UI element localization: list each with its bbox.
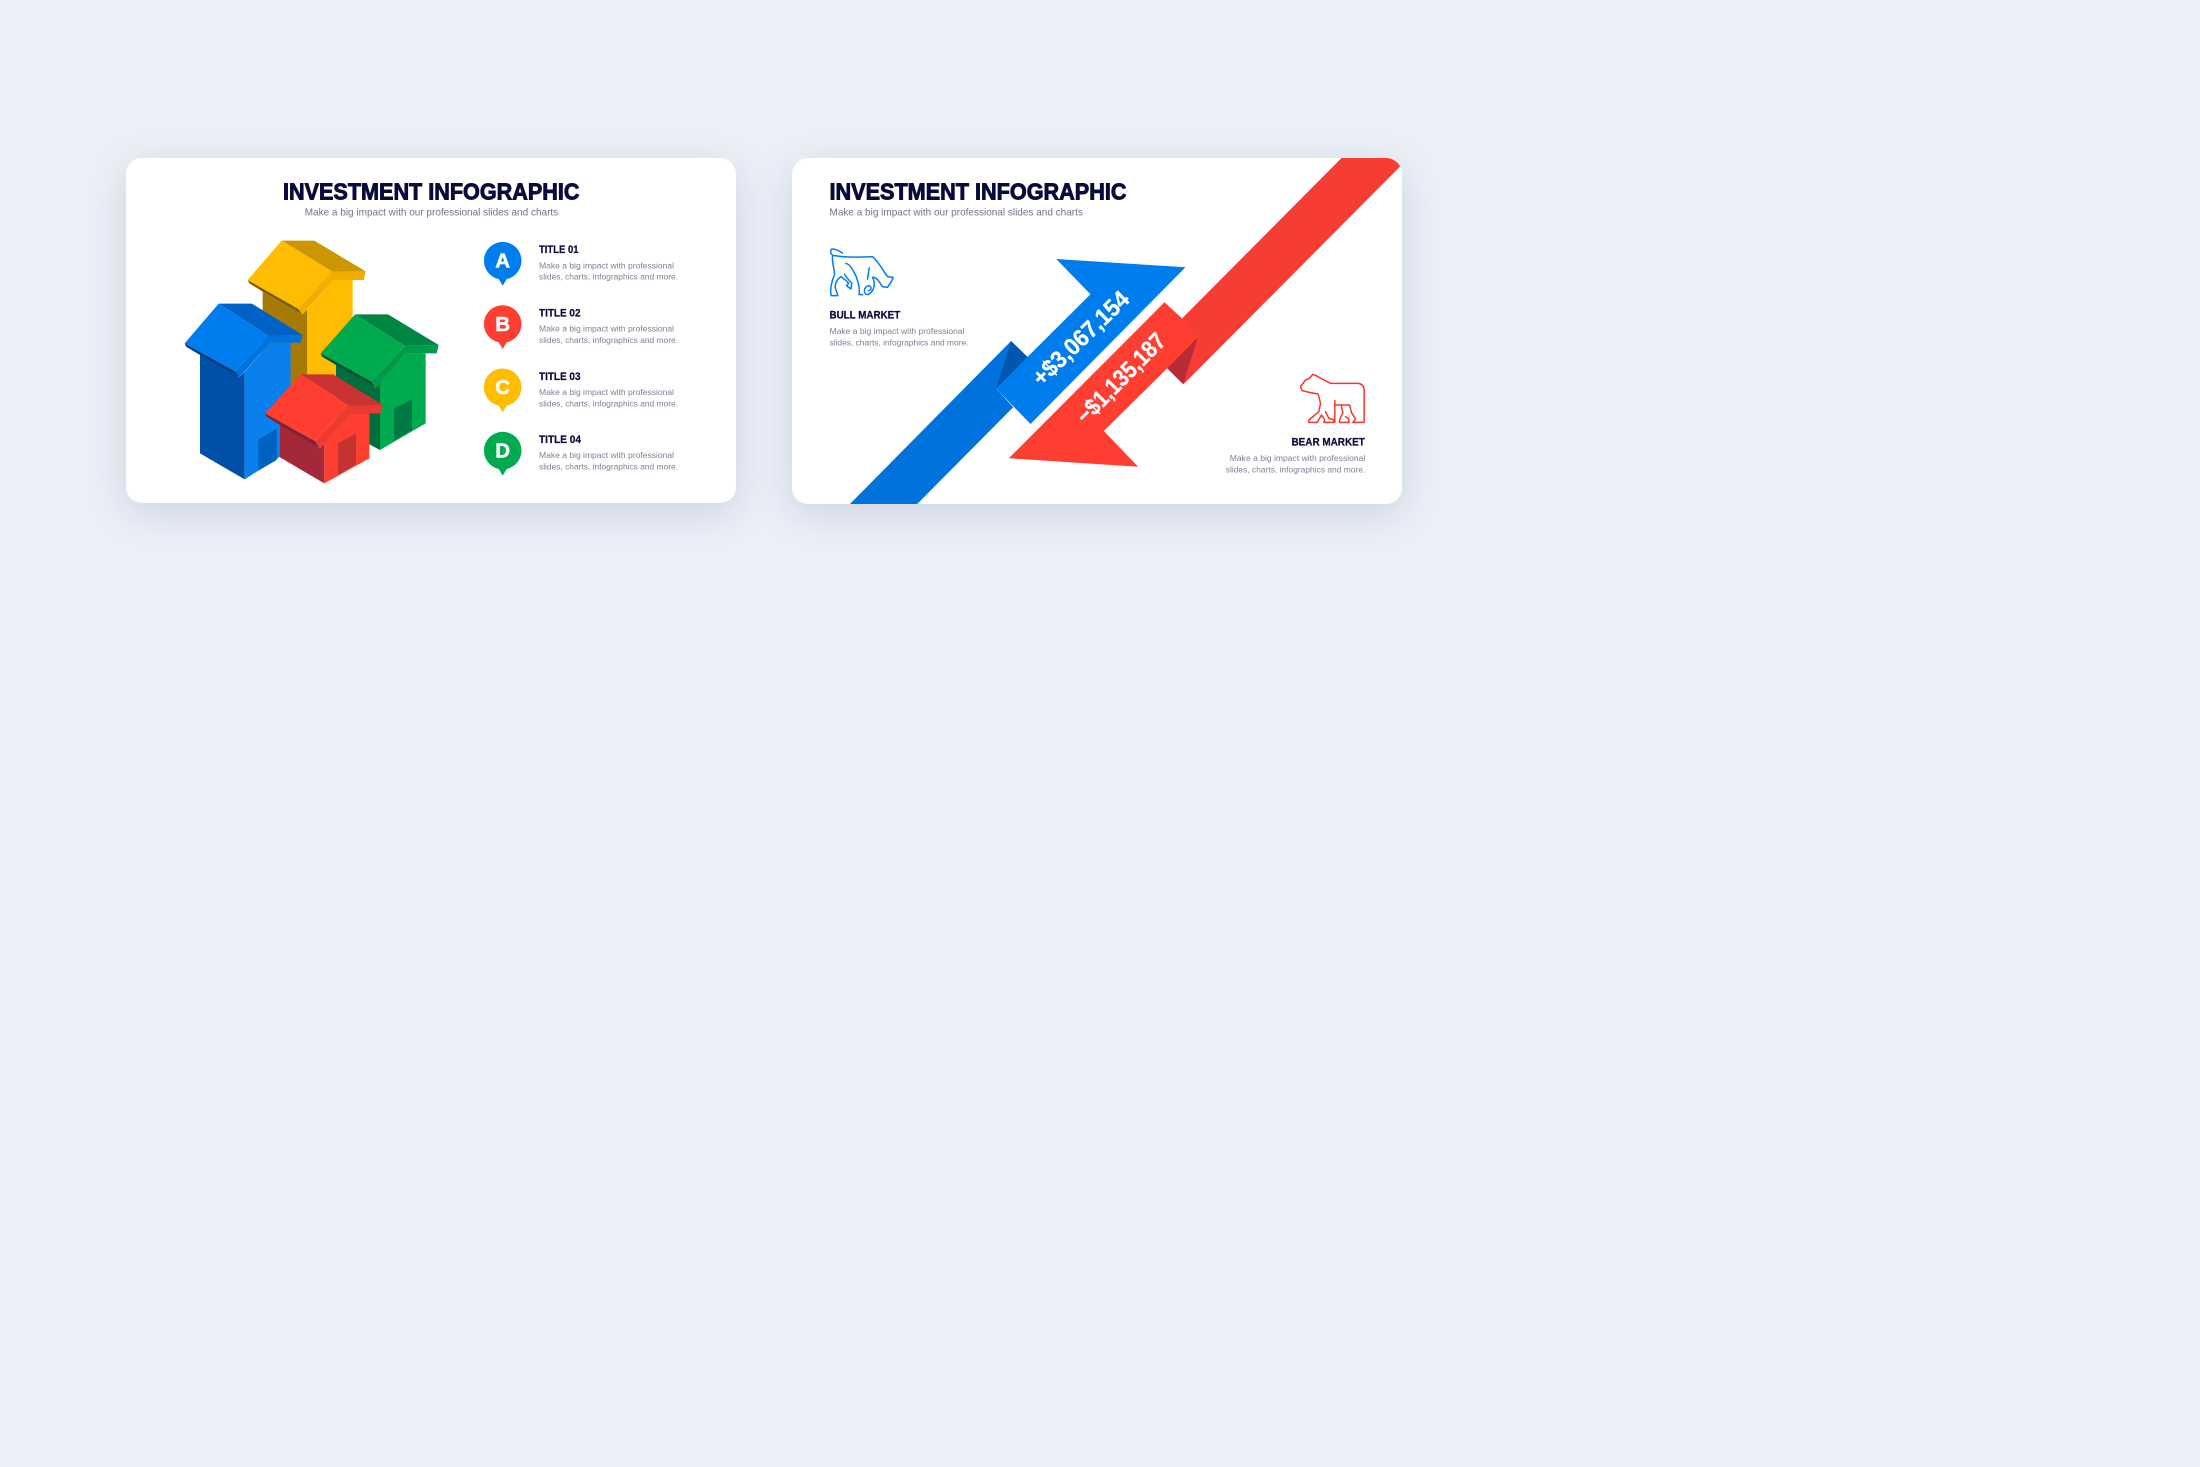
item description: slides, charts, infographics and more. [539,398,678,408]
bull market heading: BULL MARKET [829,309,900,321]
item description: Make a big impact with professional [539,387,674,397]
value: bear amount: −$1,135,187 [1070,328,1171,429]
house: blue [185,304,303,479]
item heading: TITLE 04 [539,434,582,446]
item description: slides, charts, infographics and more. [539,462,678,472]
bull market description: Make a big impact with professional [829,326,964,336]
pin C: C [495,376,510,399]
house: yellow [248,241,366,403]
title: INVESTMENT INFOGRAPHIC [829,178,1126,204]
item heading: TITLE 01 [539,244,578,256]
subtitle: Make a big impact with our professional slides and charts [305,206,558,218]
house: red [265,374,383,483]
isometric houses chart [185,241,439,483]
bear market heading: BEAR MARKET [1291,436,1365,448]
item description [539,450,678,472]
panel: houses investment slide [126,158,736,503]
pin D [484,432,522,476]
item description: slides, charts, infographics and more. [539,272,678,282]
pin A: A [495,250,510,272]
house: green [321,314,439,450]
arrow: red downward [1008,150,1416,467]
item heading: TITLE 03 [539,371,580,383]
bull market description [829,326,968,347]
panel: bull and bear market slide [792,158,1402,504]
icon: bear [1300,374,1364,422]
item description [539,387,678,408]
item description: slides, charts, infographics and more. [539,335,678,345]
title: INVESTMENT INFOGRAPHIC [283,178,580,204]
item description: Make a big impact with professional [539,450,674,460]
subtitle: Make a big impact with our professional slides and charts [829,206,1082,218]
value: bull amount: +$3,067,154 [1027,285,1135,391]
pin D: D [495,439,510,462]
item description: Make a big impact with professional [539,260,674,270]
pin A [484,242,522,286]
list item A [484,242,678,286]
pin C [484,368,522,412]
pin B [484,305,522,349]
list item D [484,432,678,476]
bull market description: slides, charts, infographics and more. [829,337,968,347]
list item B [484,305,678,349]
item description [539,260,678,282]
icon: bull [830,249,893,296]
list item C [484,368,678,412]
bear market description: slides, charts, infographics and more. [1225,464,1365,474]
bear market description [1225,453,1365,474]
pin B: B [495,313,510,336]
item description: Make a big impact with professional [539,324,674,334]
bear market description: Make a big impact with professional [1229,453,1365,463]
item heading: TITLE 02 [539,308,580,320]
arrow: blue upward [844,259,1185,510]
item description [539,324,678,345]
